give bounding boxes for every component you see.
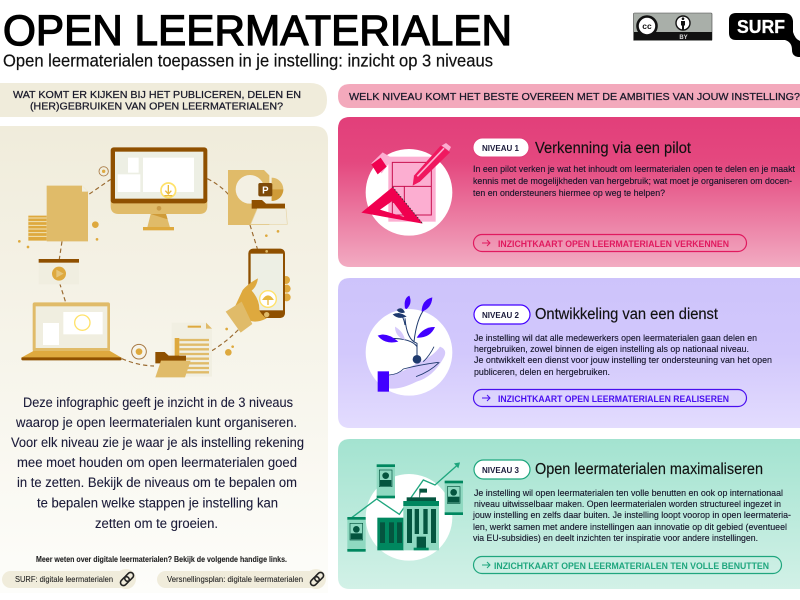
monitor xyxy=(111,147,207,230)
decorative targets xyxy=(18,167,279,359)
introduction text: mee moet houden om open leermaterialen goed xyxy=(17,455,297,470)
badge: niveau 1: NIVEAU 1 xyxy=(482,144,520,153)
introduction text: Voor elk niveau zie je waar je als instelling rekening xyxy=(11,435,304,450)
text: niveau 3: niveau uitwisselbaar maken. Open leermaterialen worden structureel ingezet in xyxy=(474,499,781,509)
illustration: open material cycle xyxy=(18,147,291,377)
heading: niveau 2: Ontwikkeling van een dienst xyxy=(535,306,719,323)
introduction text: Deze infographic geeft je inzicht in de 3 niveaus xyxy=(23,395,293,410)
panel: niveau 3 xyxy=(338,439,800,589)
button: niveau 1: INZICHTKAART OPEN LEERMATERIALEN VERKENNEN xyxy=(498,239,729,250)
text: niveau 3: Je instelling wil open leermaterialen ten volle benutten en ook op internationaal xyxy=(474,488,783,498)
badge: niveau 2 xyxy=(474,305,530,324)
heading pill: left question xyxy=(0,83,327,117)
heading: niveau 1: Verkenning via een pilot xyxy=(535,140,692,157)
subtitle: Open leermaterialen toepassen in je instelling: inzicht op 3 niveaus xyxy=(3,50,493,70)
button: niveau 3 xyxy=(474,556,782,574)
link: Versnellingsplan xyxy=(157,569,326,589)
logo: creative commons BY: cc xyxy=(642,21,652,31)
badge: niveau 2: NIVEAU 2 xyxy=(482,311,520,320)
panel: left introduction xyxy=(0,126,328,593)
text: niveau 2 xyxy=(474,333,772,377)
video player xyxy=(39,259,79,284)
presentation file xyxy=(228,170,287,225)
heading pill: left question: WAT KOMT ER KIJKEN BIJ HET PUBLICEREN, DELEN EN xyxy=(13,90,301,101)
heading pill: right question xyxy=(338,84,800,108)
stacked document xyxy=(28,186,88,241)
badge: niveau 3: NIVEAU 3 xyxy=(482,466,520,475)
introduction text: te bepalen welke stappen je instelling kan xyxy=(37,496,278,510)
button: niveau 1 xyxy=(474,234,746,252)
introduction text: waarop je open leermaterialen kunt organiseren. xyxy=(15,415,297,430)
logo: SURF: SURF xyxy=(737,17,785,37)
footer note: Meer weten over digitale leermaterialen? Bekijk de volgende handige links. xyxy=(36,555,287,564)
badge: niveau 1 xyxy=(473,138,529,157)
icon: institutions and growth xyxy=(347,462,463,561)
logo: SURF xyxy=(729,13,800,57)
heading pill: left question: (HER)GEBRUIKEN VAN OPEN LEERMATERIALEN? xyxy=(30,102,283,112)
icon: hand with plant xyxy=(366,296,452,396)
text: niveau 2: Je instelling wil dat alle medewerkers open leermaterialen gaan delen en xyxy=(474,333,757,343)
text: niveau 3: jouw instelling en zelfs daar buiten. Je instelling loopt voorop in open leermateria- xyxy=(472,510,791,520)
text: niveau 1: In een pilot verken je wat het inhoudt om leermaterialen open te delen en je maakt xyxy=(473,164,796,174)
link: Versnellingsplan: Versnellingsplan: digitale leermaterialen xyxy=(167,575,303,584)
introduction text xyxy=(11,395,304,531)
logo: creative commons BY xyxy=(634,13,712,41)
text: niveau 3: via EU-subsidies) en deelt inzichten ter inspiratie voor andere instellingen. xyxy=(473,533,758,543)
text: niveau 3 xyxy=(472,488,791,543)
text: niveau 1 xyxy=(473,164,796,198)
link: SURF: SURF: digitale leermaterialen xyxy=(15,575,113,584)
title: OPEN LEERMATERIALEN xyxy=(3,7,512,55)
heading: niveau 3: Open leermaterialen maximaliseren xyxy=(535,461,763,478)
text: niveau 1: ten en ondersteuners hiermee op weg te helpen? xyxy=(473,188,665,198)
button: niveau 2: INZICHTKAART OPEN LEERMATERIALEN REALISEREN xyxy=(498,394,729,405)
document with folder xyxy=(155,323,212,377)
link: SURF xyxy=(2,569,136,589)
introduction text: in te zetten. Bekijk de niveaus om te bepalen om xyxy=(17,475,297,490)
laptop xyxy=(21,302,122,360)
phone with hand xyxy=(226,249,291,333)
text: niveau 1: kennis met de mogelijkheden van hergebruik; wat moet je organiseren om docen- xyxy=(473,176,792,186)
icon: drawing tools xyxy=(361,143,452,236)
text: niveau 3: len, werkt samen met andere instellingen aan innovatie op dit gebied (eventueel xyxy=(473,522,787,532)
button: niveau 3: INZICHTKAART OPEN LEERMATERIALEN TEN VOLLE BENUTTEN xyxy=(494,561,769,572)
presentation file: P xyxy=(262,185,269,196)
introduction text: zetten om te groeien. xyxy=(95,516,218,531)
text: niveau 2: Je ontwikkelt een dienst voor jouw instelling ter ondersteuning van het open xyxy=(474,355,772,365)
button: niveau 2 xyxy=(474,390,746,406)
heading pill: right question: WELK NIVEAU KOMT HET BESTE OVEREEN MET DE AMBITIES VAN JOUW INSTELLING? xyxy=(349,92,800,103)
panel: niveau 1 xyxy=(338,117,800,267)
logo: creative commons BY: BY xyxy=(679,35,688,41)
panel: niveau 2 xyxy=(338,278,800,428)
text: niveau 2: publiceren, delen en hergebruiken. xyxy=(474,367,610,377)
text: niveau 2: hergebruiken, zowel binnen de eigen instelling als op nationaal niveau. xyxy=(474,344,749,354)
badge: niveau 3 xyxy=(474,460,530,479)
